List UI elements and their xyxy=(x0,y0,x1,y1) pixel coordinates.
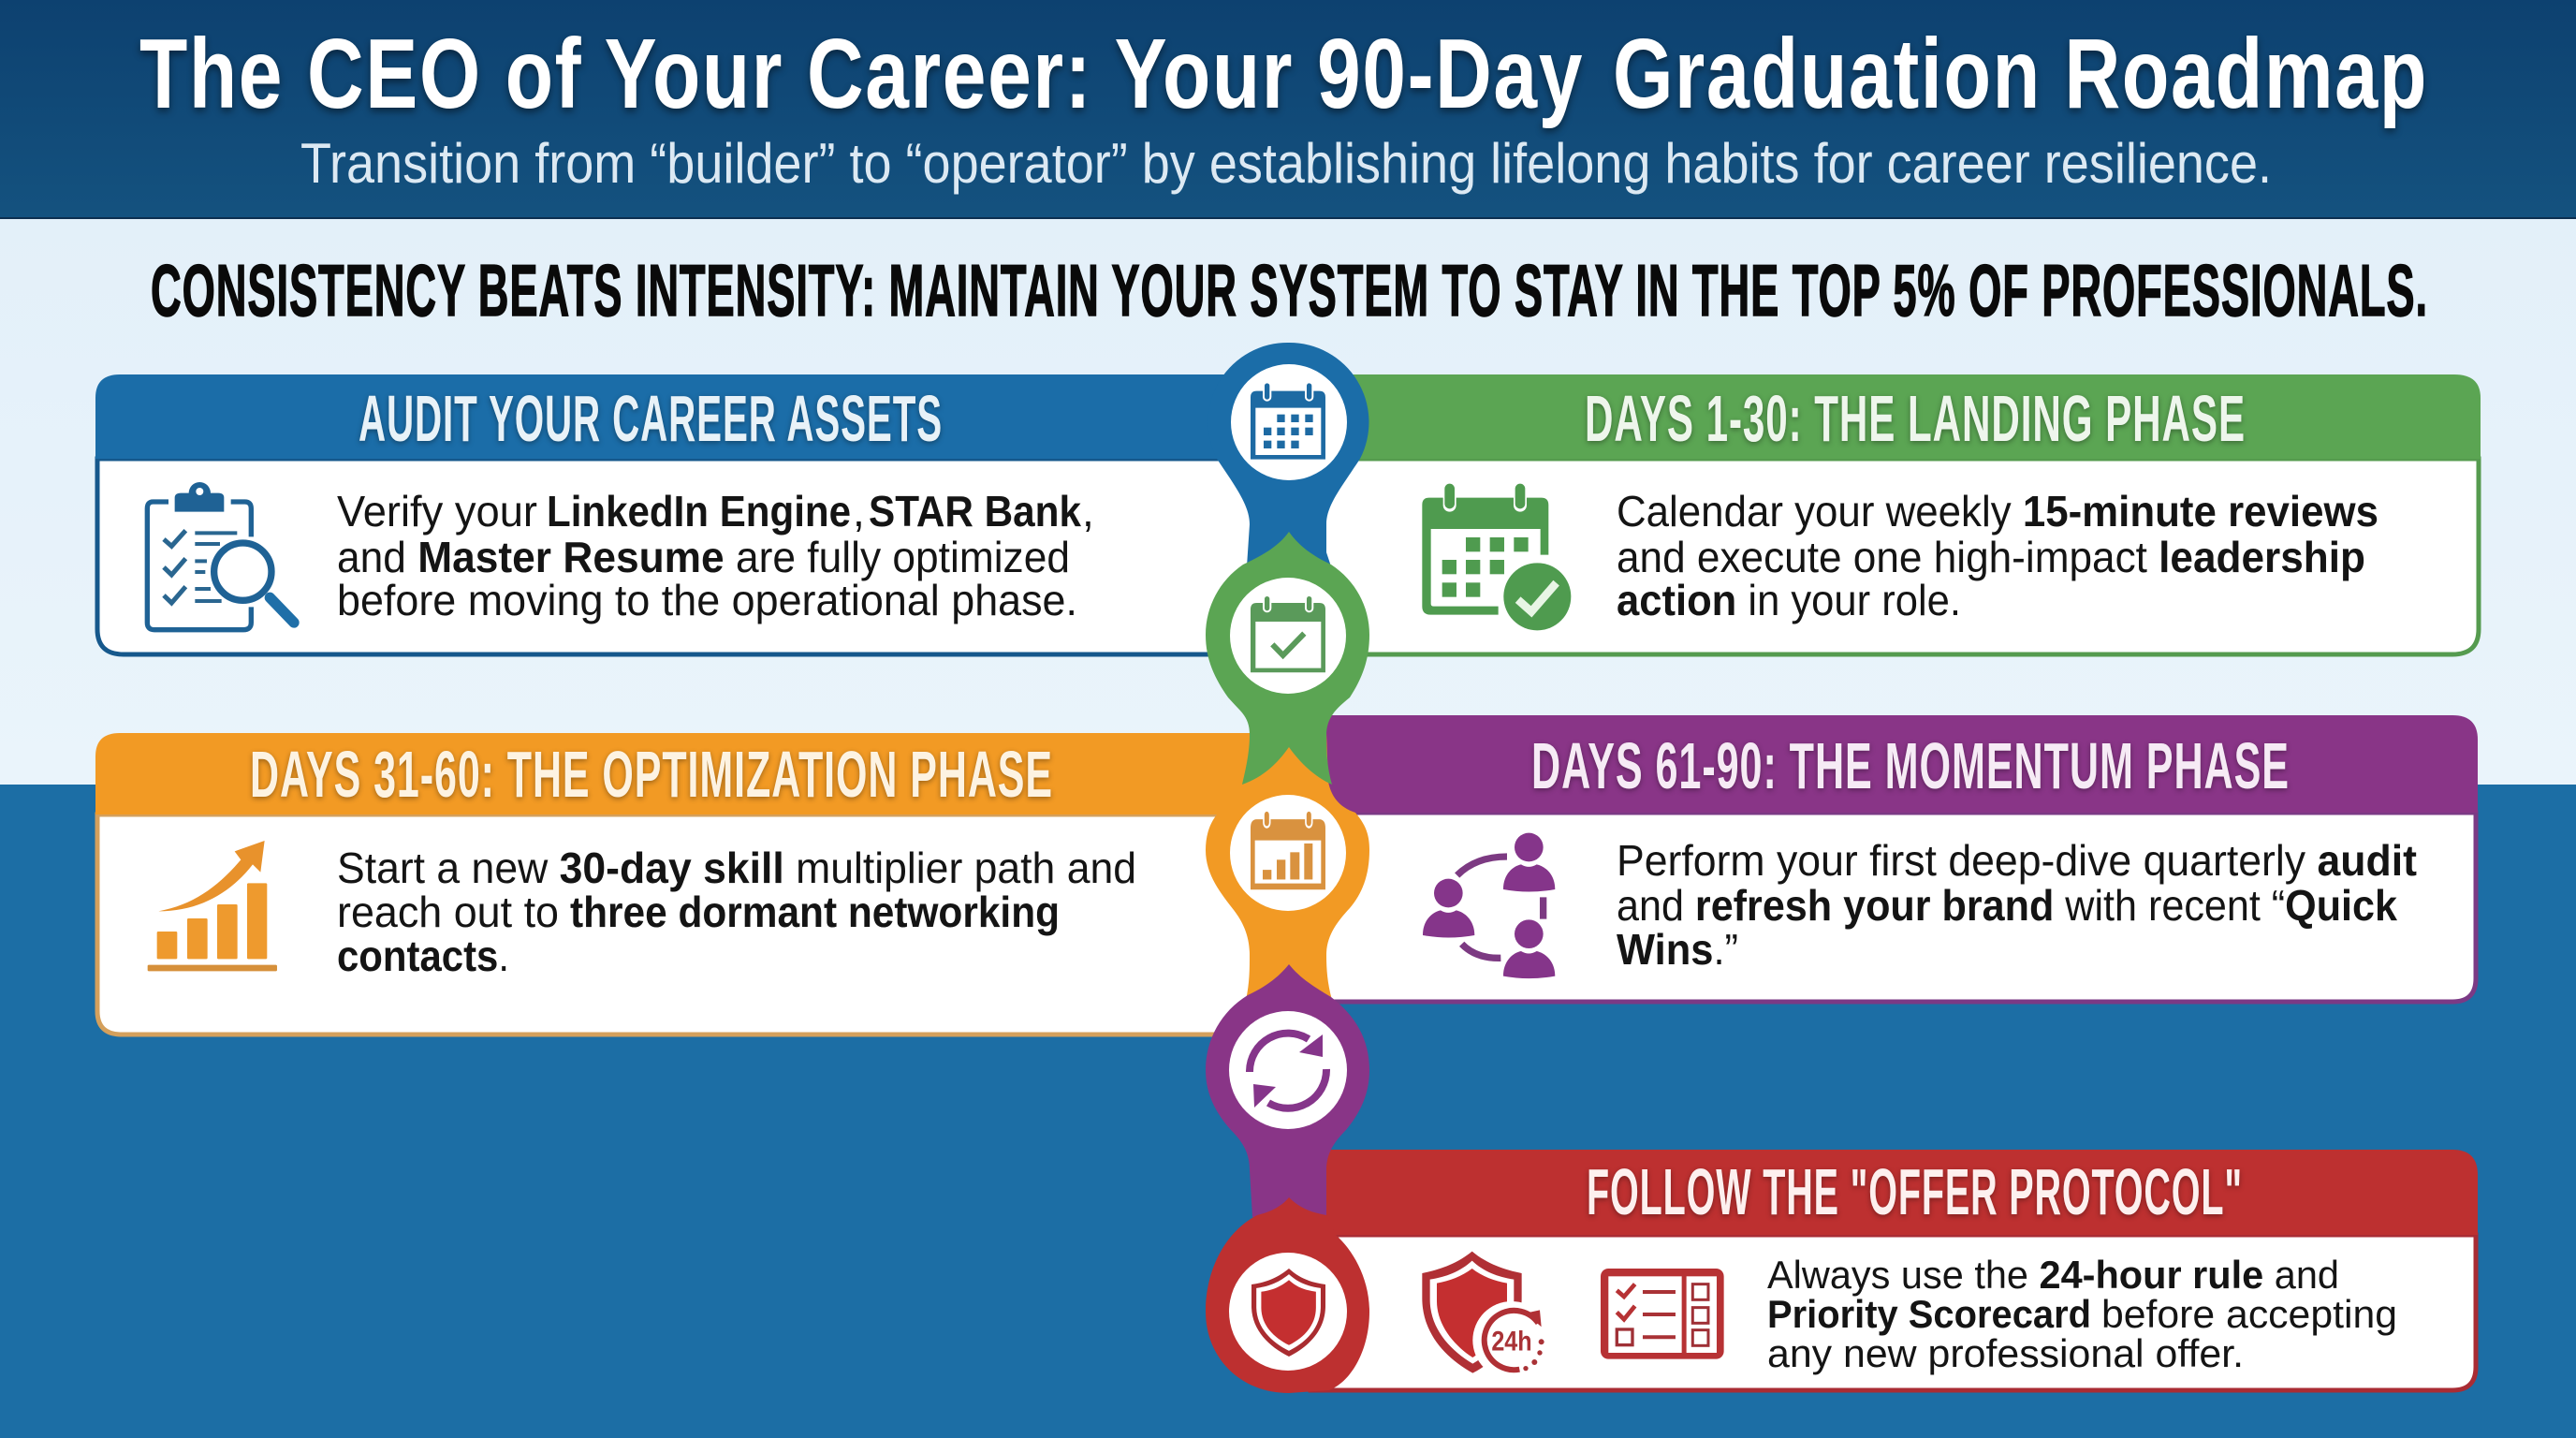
icon: calendar with bars xyxy=(1251,811,1325,889)
title: The CEO of Your Career: Your 90-Day xyxy=(139,19,1584,129)
icon: refresh arrows xyxy=(1250,1034,1326,1108)
icon: shield with 24h clock xyxy=(1422,1252,1551,1379)
text: optimization body: Start a new 30-day skill multiplier path and xyxy=(337,844,1136,892)
icon: clipboard with magnifier xyxy=(147,482,294,630)
connector node: blue calendar xyxy=(1208,343,1368,566)
text: momentum body: Perform your first deep-dive quarterly audit xyxy=(1617,836,2417,885)
text: optimization body: reach out to xyxy=(337,888,559,936)
panel: days 61-90 momentum phase xyxy=(1310,715,2478,1002)
panel: audit your career assets xyxy=(95,374,1289,654)
icon: calendar grid xyxy=(1251,382,1325,460)
text: offer protocol body: any new professional offer. xyxy=(1767,1331,2244,1375)
connector node: red shield xyxy=(1206,1197,1369,1393)
icon: growth chart with arrow xyxy=(148,841,277,971)
icon: three people in a cycle xyxy=(1423,833,1555,978)
text: audit body: LinkedIn Engine xyxy=(547,487,851,536)
panel: days 31-60 optimization phase xyxy=(95,733,1329,1034)
text: offer protocol body: Always use the 24-hour rule and xyxy=(1767,1253,2339,1297)
text: optimization body: contacts. xyxy=(337,932,509,980)
text: optimization body xyxy=(337,844,1136,980)
heading: audit: AUDIT YOUR CAREER ASSETS xyxy=(359,382,943,455)
text: audit body: and Master Resume are fully optimized xyxy=(337,533,1070,581)
text: audit body: , xyxy=(853,487,865,536)
text: momentum body: and refresh your brand with recent “Quick xyxy=(1617,881,2397,930)
icon: shield xyxy=(1251,1269,1325,1357)
background: light upper band xyxy=(0,219,2576,785)
text: audit body: STAR Bank xyxy=(869,487,1081,536)
icon: calendar with check xyxy=(1422,482,1573,632)
panel: days 1-30 landing phase xyxy=(1289,374,2481,654)
icon: calendar check xyxy=(1251,595,1325,672)
text: offer protocol body: before accepting xyxy=(2101,1292,2397,1336)
text: audit body xyxy=(337,487,1094,624)
text: audit body: , xyxy=(1082,487,1094,536)
text: momentum body: Wins.” xyxy=(1617,925,1738,974)
background: blue lower band xyxy=(0,785,2576,1438)
text: audit body: before moving to the operational phase. xyxy=(337,576,1077,624)
connector node: orange growth calendar xyxy=(1206,733,1369,1000)
panel: follow the offer protocol xyxy=(1310,1150,2478,1390)
text: audit body: Verify your xyxy=(337,487,537,536)
header banner xyxy=(0,0,2576,219)
icon: priority scorecard xyxy=(1601,1269,1724,1359)
connector node: green calendar check xyxy=(1206,532,1369,785)
heading: optimization: DAYS 31-60: THE OPTIMIZATION PHASE xyxy=(250,738,1053,811)
text: landing body: Calendar your weekly 15-minute reviews xyxy=(1617,487,2378,536)
text: landing body xyxy=(1617,487,2378,624)
text: offer protocol body xyxy=(1767,1253,2397,1375)
subtitle: Transition from “builder” to “operator” by establishing lifelong habits for career resilience. xyxy=(300,132,2272,195)
text: landing body: action in your role. xyxy=(1617,576,1961,624)
text: momentum body xyxy=(1617,836,2417,974)
text: optimization body: three dormant networking xyxy=(570,888,1060,936)
text: landing body: and execute one high-impact leadership xyxy=(1617,533,2365,581)
text: offer protocol body: Priority Scorecard xyxy=(1767,1292,2091,1336)
icon label: 24h: 24h xyxy=(1491,1327,1532,1357)
connector node: purple refresh xyxy=(1206,964,1369,1217)
